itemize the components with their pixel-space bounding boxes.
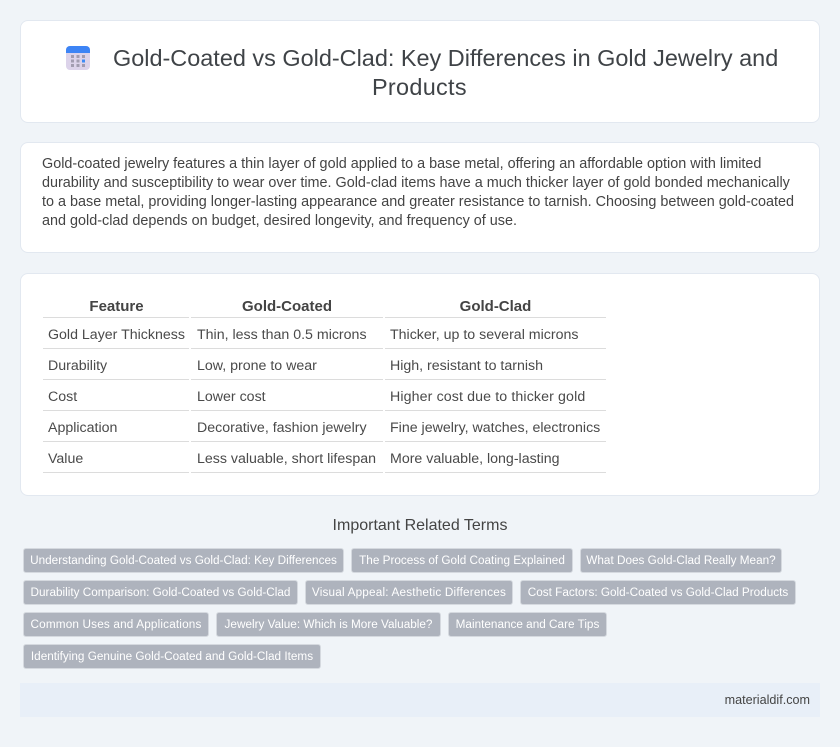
comparison table: Gold Layer Thickness (48, 327, 185, 343)
comparison table: Gold-Clad (460, 298, 531, 315)
title (113, 45, 778, 100)
icon: calendar (66, 46, 90, 70)
comparison table: Feature (89, 298, 144, 315)
comparison table: Cost (48, 389, 77, 405)
related term tags: Understanding Gold-Coated vs Gold-Clad: Key Differences (30, 554, 337, 567)
comparison table: Less valuable, short lifespan (197, 451, 376, 467)
related term tags: Maintenance and Care Tips (456, 618, 599, 631)
intro text: durability and susceptibility to wear over time. Gold-clad items have a much thicker layer of gold bonded mechanically (42, 175, 790, 191)
intro text: Gold-coated jewelry features a thin layer of gold applied to a base metal, offering an affordable option with limited (42, 156, 761, 172)
related term tags: Common Uses and Applications (30, 618, 202, 631)
intro text (42, 156, 794, 229)
footer bar (20, 683, 820, 717)
title: Products (372, 74, 467, 100)
intro panel (20, 142, 820, 253)
related term tags: Durability Comparison: Gold-Coated vs Gold-Clad (31, 586, 290, 599)
related term tags: Cost Factors: Gold-Coated vs Gold-Clad Products (528, 586, 788, 599)
table panel (20, 273, 820, 496)
comparison table: Application (48, 420, 117, 436)
comparison table (43, 298, 606, 473)
footer site name: materialdif.com (725, 693, 810, 707)
comparison table: High, resistant to tarnish (390, 358, 543, 374)
intro text: to a base metal, providing longer-lasting appearance and greater resistance to tarnish. Choosing between gold-coated (42, 194, 794, 210)
related term tags: What Does Gold-Clad Really Mean? (586, 554, 776, 567)
comparison table: Value (48, 451, 83, 467)
related term tags (23, 548, 796, 669)
comparison table: More valuable, long-lasting (390, 451, 560, 467)
comparison table: Gold-Coated (242, 298, 332, 315)
related term tags: Identifying Genuine Gold-Coated and Gold-Clad Items (31, 650, 313, 663)
related terms heading: Important Related Terms (333, 517, 507, 534)
comparison table: Thicker, up to several microns (390, 327, 578, 343)
related term tags: Jewelry Value: Which is More Valuable? (225, 618, 432, 631)
header card (20, 20, 820, 123)
comparison table: Durability (48, 358, 107, 374)
related term tags: Visual Appeal: Aesthetic Differences (312, 586, 506, 599)
comparison table: Decorative, fashion jewelry (197, 420, 367, 436)
comparison table: Higher cost due to thicker gold (390, 389, 585, 405)
title: Gold-Coated vs Gold-Clad: Key Differences in Gold Jewelry and (113, 45, 778, 71)
comparison table: Lower cost (197, 389, 266, 405)
comparison table: Thin, less than 0.5 microns (197, 327, 367, 343)
comparison table: Fine jewelry, watches, electronics (390, 420, 600, 436)
intro text: and gold-clad depends on budget, desired longevity, and frequency of use. (42, 213, 517, 229)
comparison table: Low, prone to wear (197, 358, 317, 374)
related term tags: The Process of Gold Coating Explained (359, 554, 565, 567)
